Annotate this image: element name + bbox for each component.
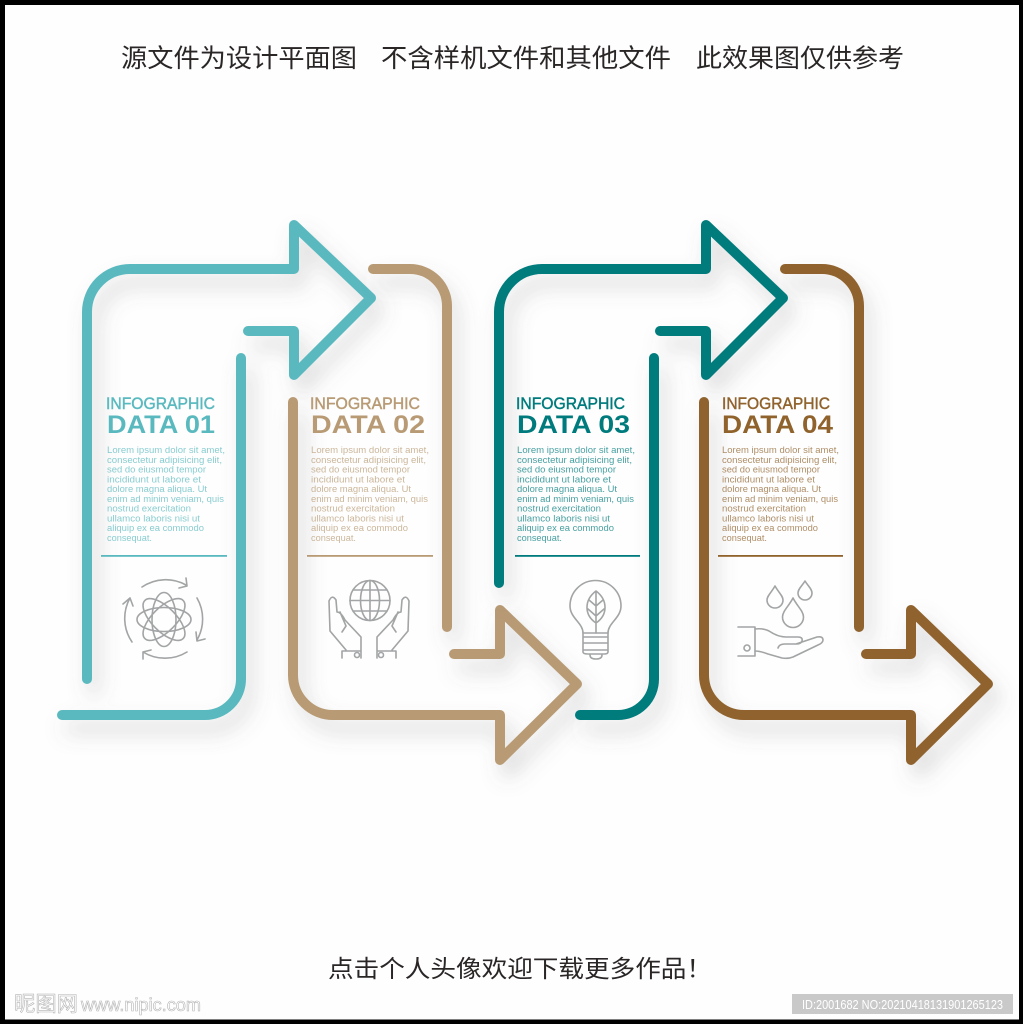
panel: data 02 text [307, 395, 433, 557]
top heading [121, 45, 904, 73]
panel: data 01 text: enim ad minim veniam, quis [107, 494, 224, 505]
icon: hand with water drops [738, 581, 823, 658]
panel: data 02 text: consequat. [311, 533, 356, 544]
panel: data 01 text: Lorem ipsum dolor sit amet, [107, 445, 225, 456]
panel: data 01 text: aliquip ex ea commodo [107, 523, 204, 534]
panel: data 04 text: enim ad minim veniam, quis [722, 494, 838, 505]
panel: data 01 text [101, 395, 227, 557]
panel: data 04 text: aliquip ex ea commodo [722, 523, 818, 534]
panel: data 03 text: INFOGRAPHIC [516, 395, 625, 413]
panel: data 01 text: consequat. [107, 533, 152, 544]
panel: data 04 text: Lorem ipsum dolor sit amet, [722, 445, 839, 456]
arrow 2: tan [293, 269, 577, 760]
panel: data 01 text: consectetur adipisicing elit, [107, 455, 222, 466]
watermark: id badge [792, 994, 1013, 1014]
panel: data 04 text: consectetur adipisicing elit, [722, 455, 837, 466]
top heading: 源文件为设计平面图 [121, 45, 357, 73]
panel: data 03 text: ullamco laboris nisi ut [517, 514, 610, 524]
panel: data 04 text: nostrud exercitation [722, 504, 806, 514]
panel: data 02 text: enim ad minim veniam, quis [311, 494, 428, 505]
panel: data 01 text: incididunt ut labore et [107, 474, 201, 486]
top heading: 此效果图仅供参考 [696, 45, 904, 73]
panel: data 04 text: INFOGRAPHIC [722, 395, 830, 413]
watermark: nipic logo: 昵图网 [14, 993, 78, 1016]
panel: data 03 text [515, 395, 640, 557]
panel: data 02 text: sed do eiusmod tempor [311, 464, 411, 476]
panel: data 02 text: Lorem ipsum dolor sit amet, [311, 445, 429, 456]
arrow 3: dark teal [499, 225, 783, 715]
arrow 4: brown [704, 269, 988, 760]
panel: data 03 text: aliquip ex ea commodo [517, 523, 614, 534]
panel: data 03 text: dolore magna aliqua. Ut [517, 484, 617, 495]
panel: data 04 text [718, 395, 843, 557]
icon: atom with cycle arrows [123, 578, 205, 659]
panel: data 04 text: dolore magna aliqua. Ut [722, 484, 821, 495]
panel: data 04 text: consequat. [722, 533, 767, 544]
panel: data 02 text: incididunt ut labore et [311, 474, 405, 486]
panel: data 01 text: nostrud exercitation [107, 504, 191, 514]
watermark: nipic logo: www.nipic.com [80, 995, 201, 1015]
panel: data 02 text: INFOGRAPHIC [310, 395, 420, 413]
panel: data 04 text: incididunt ut labore et [722, 474, 815, 486]
panel: data 01 text: sed do eiusmod tempor [107, 464, 207, 476]
panel: data 02 text: nostrud exercitation [311, 504, 395, 514]
panel: data 03 text: incididunt ut labore et [517, 474, 611, 486]
panel: data 03 text: consectetur adipisicing elit, [517, 455, 632, 466]
icon: light bulb with leaf [570, 581, 621, 659]
panel: data 04 text: sed do eiusmod tempor [722, 464, 821, 476]
panel: data 03 text: consequat. [517, 533, 562, 544]
watermark: nipic logo [14, 993, 201, 1016]
panel: data 01 text: ullamco laboris nisi ut [107, 514, 200, 524]
panel: data 04 text: DATA 04 [722, 411, 833, 439]
panel: data 01 text: DATA 01 [107, 411, 215, 439]
panel: data 03 text: nostrud exercitation [517, 504, 601, 514]
panel: data 02 text: consectetur adipisicing elit, [311, 455, 426, 466]
panel: data 02 text: dolore magna aliqua. Ut [311, 484, 411, 495]
panel: data 01 text: dolore magna aliqua. Ut [107, 484, 207, 495]
panel: data 03 text: Lorem ipsum dolor sit amet, [517, 445, 635, 456]
arrow 1: light teal [62, 225, 371, 715]
panel: data 02 text: ullamco laboris nisi ut [311, 514, 404, 524]
panel: data 04 text: ullamco laboris nisi ut [722, 514, 814, 524]
panel: data 01 text: INFOGRAPHIC [106, 395, 215, 413]
panel: data 03 text: enim ad minim veniam, quis [517, 494, 634, 505]
top heading: 不含样机文件和其他文件 [381, 45, 671, 73]
panel: data 03 text: sed do eiusmod tempor [517, 464, 617, 476]
panel: data 03 text: DATA 03 [517, 411, 630, 439]
panel: data 02 text: aliquip ex ea commodo [311, 523, 408, 534]
panel: data 02 text: DATA 02 [311, 411, 425, 439]
bottom call to action: 点击个人头像欢迎下载更多作品！ [328, 956, 712, 983]
icon: hands holding globe [329, 580, 409, 658]
